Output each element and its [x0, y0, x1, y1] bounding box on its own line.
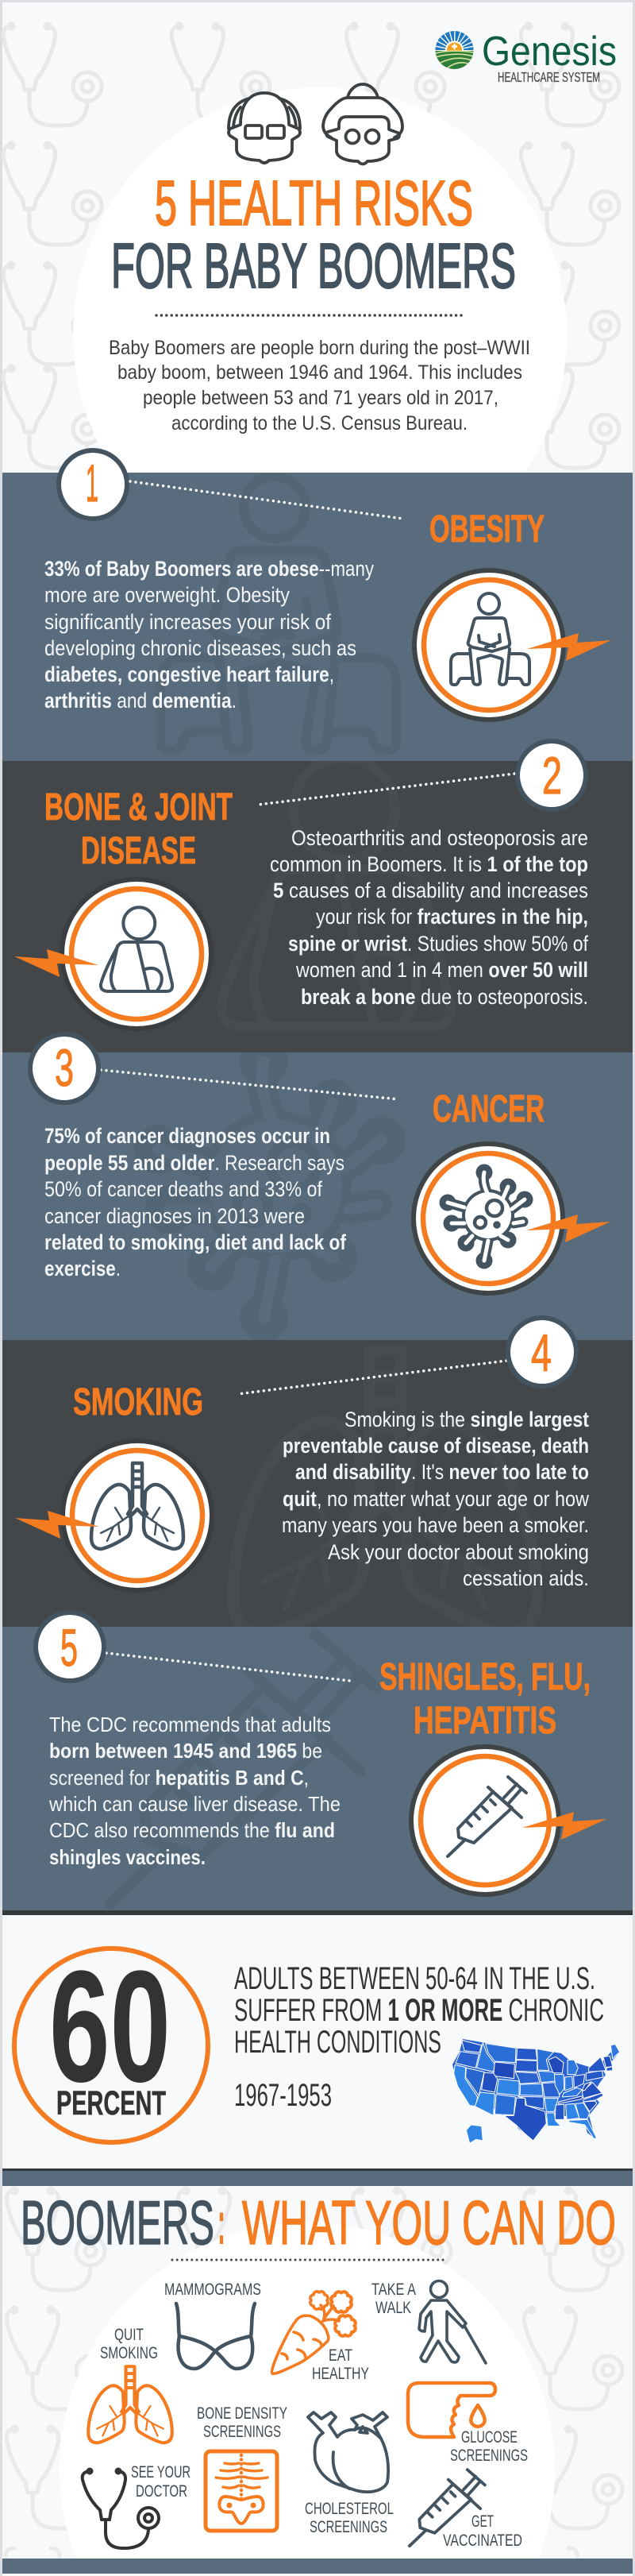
action: take a walk: TAKE A — [371, 2281, 416, 2299]
stat circle: 60 percent — [14, 1938, 208, 2142]
ghost icon: virus — [154, 1098, 351, 1265]
action: bone density screenings: SCREENINGS — [203, 2423, 281, 2441]
heading: bone and joint disease — [44, 786, 233, 872]
action: mammograms — [164, 2281, 261, 2369]
text: obesity: 33% of Baby Boomers are obese--many — [44, 557, 374, 581]
icon: lungs — [15, 1439, 214, 1593]
text: smoking: many years you have been a smoker. — [282, 1513, 589, 1537]
text: bone and joint disease: break a bone due to osteoporosis. — [301, 985, 588, 1009]
text: obesity — [44, 557, 374, 713]
panel: 3 cancer — [2, 1052, 633, 1340]
logo wordmark: Genesis — [482, 29, 617, 75]
number badge 3 — [28, 1032, 101, 1105]
text: shingles flu hepatitis: born between 1945 and 1965 be — [49, 1739, 322, 1763]
text: shingles flu hepatitis: shingles vaccines. — [49, 1845, 206, 1869]
action: see your doctor: SEE YOUR — [131, 2463, 190, 2481]
stat text: HEALTH CONDITIONS — [234, 2025, 441, 2060]
number badge 1 — [56, 448, 129, 521]
text: bone and joint disease — [270, 826, 588, 1009]
white intro circle — [73, 92, 565, 442]
US map — [452, 2039, 620, 2143]
text: smoking: Smoking is the single largest — [344, 1408, 589, 1431]
panel: what you can do — [6, 2188, 622, 2559]
background pattern: stethoscopes top — [3, 24, 619, 468]
text: shingles flu hepatitis: CDC also recommends the flu and — [49, 1818, 335, 1842]
text: obesity: developing chronic diseases, such as — [44, 636, 356, 660]
text: obesity: significantly increases your risk of — [44, 610, 331, 634]
text: cancer — [44, 1124, 347, 1280]
stat circle: 60 percent: PERCENT — [56, 2084, 166, 2122]
action: glucose screenings — [408, 2383, 528, 2465]
panel: 4 smoking — [2, 1340, 633, 1634]
logo emblem — [435, 30, 475, 70]
number badge 4 — [506, 1315, 579, 1388]
ghost icon: lungs — [233, 1350, 537, 1634]
heading: smoking: SMOKING — [73, 1381, 203, 1423]
text: cancer: 50% of cancer deaths and 33% of — [44, 1177, 322, 1201]
number badge 1: 1 — [86, 454, 98, 512]
intro text: according to the U.S. Census Bureau. — [171, 412, 468, 434]
icon: person on couch — [412, 568, 611, 722]
heading: bone and joint disease: BONE & JOINT — [44, 786, 233, 828]
action: cholesterol screenings: CHOLESTEROL — [305, 2500, 394, 2518]
text: smoking: Ask your doctor about smoking — [328, 1540, 589, 1564]
action: take a walk — [371, 2281, 486, 2363]
text: shingles flu hepatitis — [48, 1713, 341, 1869]
heading: boomers what you can do: : — [217, 2188, 225, 2257]
text: obesity: arthritis and dementia. — [44, 689, 237, 713]
text: shingles flu hepatitis: which can cause liver disease. The — [48, 1792, 341, 1816]
text: bone and joint disease: Osteoarthritis and osteoporosis are — [291, 826, 588, 850]
action: quit smoking: QUIT — [114, 2326, 144, 2344]
stat text: 1967-1953 — [234, 2078, 332, 2113]
text: shingles flu hepatitis: screened for hepatitis B and C, — [49, 1766, 309, 1790]
action: see your doctor: DOCTOR — [136, 2482, 187, 2501]
number badge 4: 4 — [531, 1323, 552, 1382]
icon: virus — [411, 1141, 610, 1296]
text: smoking — [282, 1408, 589, 1590]
text: smoking: cessation aids. — [463, 1566, 589, 1590]
panel: 1 obesity — [2, 448, 633, 761]
action: quit smoking — [88, 2326, 172, 2443]
heading: bone and joint disease: DISEASE — [81, 830, 196, 872]
panel: 60 percent statistic — [14, 1938, 620, 2143]
text: smoking: quit, no matter what your age or how — [283, 1487, 589, 1511]
text: obesity: diabetes, congestive heart failure, — [44, 662, 334, 686]
action: see your doctor — [83, 2463, 190, 2548]
panel: 5 shingles flu hepatitis — [2, 1627, 633, 1910]
text: cancer: related to smoking, diet and lack of — [44, 1230, 347, 1254]
action: take a walk: WALK — [375, 2299, 411, 2317]
intro text — [109, 337, 530, 434]
intro text: baby boom, between 1946 and 1964. This includes — [117, 361, 522, 384]
man face — [229, 93, 300, 163]
stat circle: 60 percent: 60 — [49, 1938, 171, 2115]
panel: 2 bone and joint disease — [2, 758, 633, 1052]
logo: Genesis Healthcare System — [435, 29, 617, 85]
text: cancer: people 55 and older. Research says — [44, 1151, 344, 1175]
woman face — [323, 84, 402, 164]
action: get vaccinated — [410, 2470, 522, 2550]
action: eat healthy: EAT — [329, 2346, 352, 2365]
text: bone and joint disease: your risk for fractures in the hip, — [316, 905, 588, 929]
action: eat healthy — [272, 2292, 369, 2383]
number badge 5: 5 — [60, 1618, 78, 1677]
icon: arm in sling — [14, 877, 214, 1031]
number badge 3: 3 — [55, 1038, 74, 1097]
action: mammograms: MAMMOGRAMS — [164, 2281, 261, 2299]
heading: boomers what you can do: BOOMERS — [21, 2188, 214, 2257]
action: glucose screenings: SCREENINGS — [450, 2447, 528, 2465]
white action circle — [60, 2223, 555, 2559]
text: cancer: 75% of cancer diagnoses occur in — [44, 1124, 330, 1148]
text: cancer: exercise. — [44, 1257, 121, 1280]
text: cancer: cancer diagnoses in 2013 were — [44, 1204, 305, 1228]
action: bone density screenings: BONE DENSITY — [197, 2404, 287, 2423]
action: bone density screenings — [197, 2404, 287, 2531]
heading: shingles flu hepatitis — [379, 1656, 591, 1742]
text: bone and joint disease: 5 causes of a disability and increases — [273, 879, 588, 902]
intro text: Baby Boomers are people born during the post–WWII — [109, 337, 530, 359]
icon: syringe — [409, 1744, 606, 1897]
number badge 2: 2 — [542, 746, 562, 805]
heading: obesity: OBESITY — [429, 508, 545, 550]
action: cholesterol screenings: SCREENINGS — [310, 2518, 387, 2536]
icons: man and woman faces — [229, 84, 402, 164]
action: cholesterol screenings — [305, 2412, 394, 2536]
action: glucose screenings: GLUCOSE — [461, 2428, 518, 2447]
action: eat healthy: HEALTHY — [312, 2365, 369, 2383]
text: shingles flu hepatitis: The CDC recommends that adults — [49, 1713, 331, 1736]
ghost icon: couch — [160, 477, 396, 751]
title — [111, 168, 516, 301]
text: smoking: and disability. It's never too late to — [295, 1460, 589, 1484]
number badge 2 — [515, 739, 588, 812]
ghost icon: arm sling — [221, 758, 450, 1026]
number badge 5 — [33, 1610, 106, 1683]
intro text: people between 53 and 71 years old in 2017, — [143, 387, 498, 409]
stat text — [234, 1961, 604, 2113]
action: get vaccinated: GET — [471, 2512, 494, 2531]
background pattern: stethoscopes bottom — [6, 2188, 622, 2557]
action: get vaccinated: VACCINATED — [443, 2532, 522, 2550]
action: quit smoking: SMOKING — [100, 2344, 158, 2362]
heading: cancer: CANCER — [433, 1088, 545, 1130]
heading: shingles flu hepatitis: HEPATITIS — [414, 1700, 556, 1742]
text: bone and joint disease: common in Boomers. It is 1 of the top — [270, 852, 588, 876]
text: obesity: more are overweight. Obesity — [44, 583, 290, 607]
heading: boomers what you can do — [21, 2188, 616, 2257]
text: bone and joint disease: women and 1 in 4 men over 50 will — [295, 958, 588, 982]
text: bone and joint disease: spine or wrist. Studies show 50% of — [288, 932, 588, 956]
